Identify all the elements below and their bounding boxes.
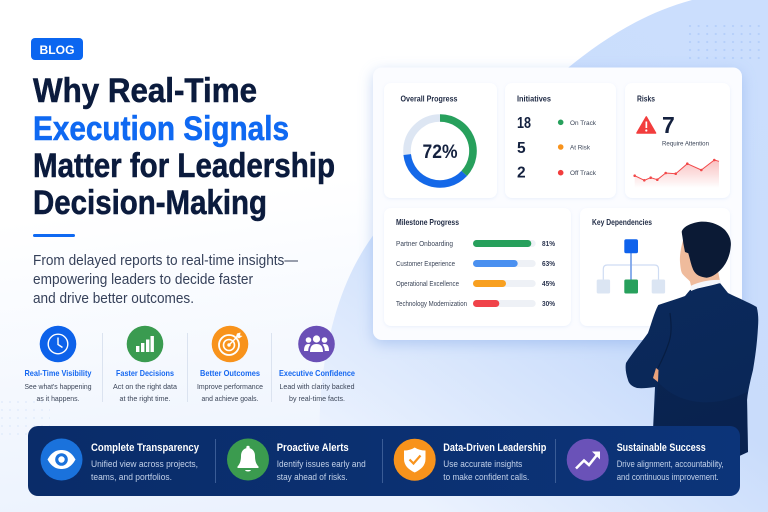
- panel: risks: Require Attention: [662, 140, 709, 148]
- feature: Data-Driven Leadership: to make confident calls.: [443, 472, 529, 482]
- icon: target: [212, 326, 248, 362]
- panel: risks: 7: [662, 112, 675, 138]
- sparkline chart: [633, 159, 719, 188]
- feature: Proactive Alerts: stay ahead of risks.: [277, 472, 348, 482]
- panel: overall progress: Overall Progress: [400, 94, 458, 104]
- benefit: Faster Decisions: Act on the right data: [113, 382, 178, 391]
- panel: initiatives: 2: [517, 164, 526, 182]
- subtitle: and drive better outcomes.: [33, 290, 194, 307]
- icon: bars: [127, 326, 163, 362]
- background blob: [320, 0, 768, 512]
- decorative dots top right: [684, 25, 762, 65]
- icon: people: [298, 326, 335, 362]
- benefit: Real-Time Visibility: as it happens.: [36, 394, 80, 403]
- row: Technology Modernization: Technology Modernization: [396, 301, 467, 308]
- panel: initiatives: On Track: [570, 120, 597, 127]
- icon: warning triangle: [637, 117, 656, 133]
- row: Partner Onboarding: [396, 240, 556, 248]
- row: Customer Experience: Customer Experience: [396, 261, 455, 268]
- icon: clock: [40, 326, 76, 362]
- row: Partner Onboarding: Partner Onboarding: [396, 241, 453, 248]
- row: Operational Excellence: Operational Excellence: [396, 281, 459, 288]
- donut chart: 72%: [422, 142, 458, 163]
- neck and face: [680, 240, 720, 288]
- suit shading: [653, 382, 748, 458]
- panel: milestone progress: [384, 208, 571, 326]
- panel: milestone progress: Milestone Progress: [396, 217, 459, 227]
- title: [33, 72, 335, 222]
- hand: [653, 368, 658, 382]
- panel: initiatives: 18: [517, 115, 531, 132]
- feature: Data-Driven Leadership: Use accurate insights: [443, 459, 523, 469]
- panel: risks: [625, 83, 730, 198]
- feature: Data-Driven Leadership: [394, 439, 547, 482]
- row: Technology Modernization: 30%: [542, 301, 556, 308]
- feature: Sustainable Success: [567, 439, 724, 482]
- benefit: Better Outcomes: and achieve goals.: [202, 394, 258, 403]
- panel: initiatives: At Risk: [570, 145, 591, 152]
- feature: Complete Transparency: [40, 438, 200, 482]
- icon: shield check: [394, 439, 436, 481]
- panel: overall progress: [384, 83, 497, 198]
- feature: Sustainable Success: Sustainable Success: [617, 442, 706, 454]
- row: Operational Excellence: [396, 280, 556, 288]
- benefit: Executive Confidence: Executive Confidence: [279, 368, 355, 378]
- panel: initiatives: 5: [517, 140, 526, 157]
- icon: trend arrow: [567, 439, 609, 481]
- icon: bell: [227, 438, 269, 480]
- benefit: Better Outcomes: Improve performance: [197, 382, 263, 391]
- benefit: Executive Confidence: Lead with clarity backed: [280, 382, 354, 391]
- icon: eye: [40, 438, 82, 480]
- title: Matter for Leadership: [33, 147, 335, 185]
- benefit: Executive Confidence: by real-time facts.: [289, 394, 345, 403]
- benefit: Better Outcomes: [197, 326, 263, 403]
- benefit: Faster Decisions: Faster Decisions: [116, 368, 174, 378]
- panel: risks: Risks: [637, 94, 655, 104]
- title: Decision-Making: [33, 184, 267, 222]
- benefit: Executive Confidence: [279, 326, 355, 403]
- feature: Proactive Alerts: Proactive Alerts: [277, 442, 349, 454]
- badge: BLOG: BLOG: [40, 43, 74, 57]
- bottom band: [28, 426, 740, 496]
- feature: Complete Transparency: teams, and portfolios.: [91, 472, 172, 482]
- benefit: Real-Time Visibility: Real-Time Visibility: [24, 368, 92, 378]
- panel: initiatives: [505, 83, 616, 198]
- row: Partner Onboarding: 81%: [542, 241, 556, 248]
- benefit: Better Outcomes: Better Outcomes: [200, 368, 260, 378]
- feature: Sustainable Success: and continuous improvement.: [617, 472, 719, 482]
- shirt collar: [690, 280, 721, 291]
- panel: key dependencies: [580, 208, 730, 326]
- decorative dots lower left: [0, 396, 50, 440]
- feature: Complete Transparency: Unified view across projects,: [91, 459, 198, 469]
- feature: Proactive Alerts: [227, 438, 366, 482]
- arm seam: [658, 313, 671, 368]
- subtitle: empowering leaders to decide faster: [33, 271, 253, 288]
- benefit: Faster Decisions: [113, 326, 178, 403]
- subtitle: [33, 252, 298, 307]
- benefit: Real-Time Visibility: See what's happening: [24, 382, 92, 391]
- feature: Data-Driven Leadership: Data-Driven Leadership: [443, 442, 547, 454]
- row: Customer Experience: 63%: [542, 261, 556, 268]
- panel: initiatives: Initiatives: [517, 94, 551, 104]
- illustration: executive viewed from behind: [626, 222, 758, 458]
- title: Why Real-Time: [33, 72, 257, 110]
- dependency tree diagram: [597, 239, 665, 294]
- row: Operational Excellence: 45%: [542, 281, 556, 288]
- panel: initiatives: Off Track: [570, 170, 597, 177]
- suit: [626, 283, 758, 458]
- hair: [682, 222, 731, 278]
- title underline: [33, 234, 75, 237]
- subtitle: From delayed reports to real-time insights—: [33, 252, 298, 269]
- feature: Sustainable Success: Drive alignment, accountability,: [617, 459, 724, 469]
- feature: Proactive Alerts: Identify issues early and: [277, 459, 366, 469]
- dashboard card: [373, 68, 742, 340]
- benefit: Faster Decisions: at the right time.: [120, 394, 170, 403]
- row: Customer Experience: [396, 260, 556, 268]
- benefit: Real-Time Visibility: [24, 326, 92, 403]
- feature: Complete Transparency: Complete Transparency: [91, 442, 200, 454]
- title: Execution Signals: [33, 110, 289, 148]
- badge: BLOG: [31, 38, 83, 60]
- panel: key dependencies: Key Dependencies: [592, 217, 652, 227]
- row: Technology Modernization: [396, 300, 556, 308]
